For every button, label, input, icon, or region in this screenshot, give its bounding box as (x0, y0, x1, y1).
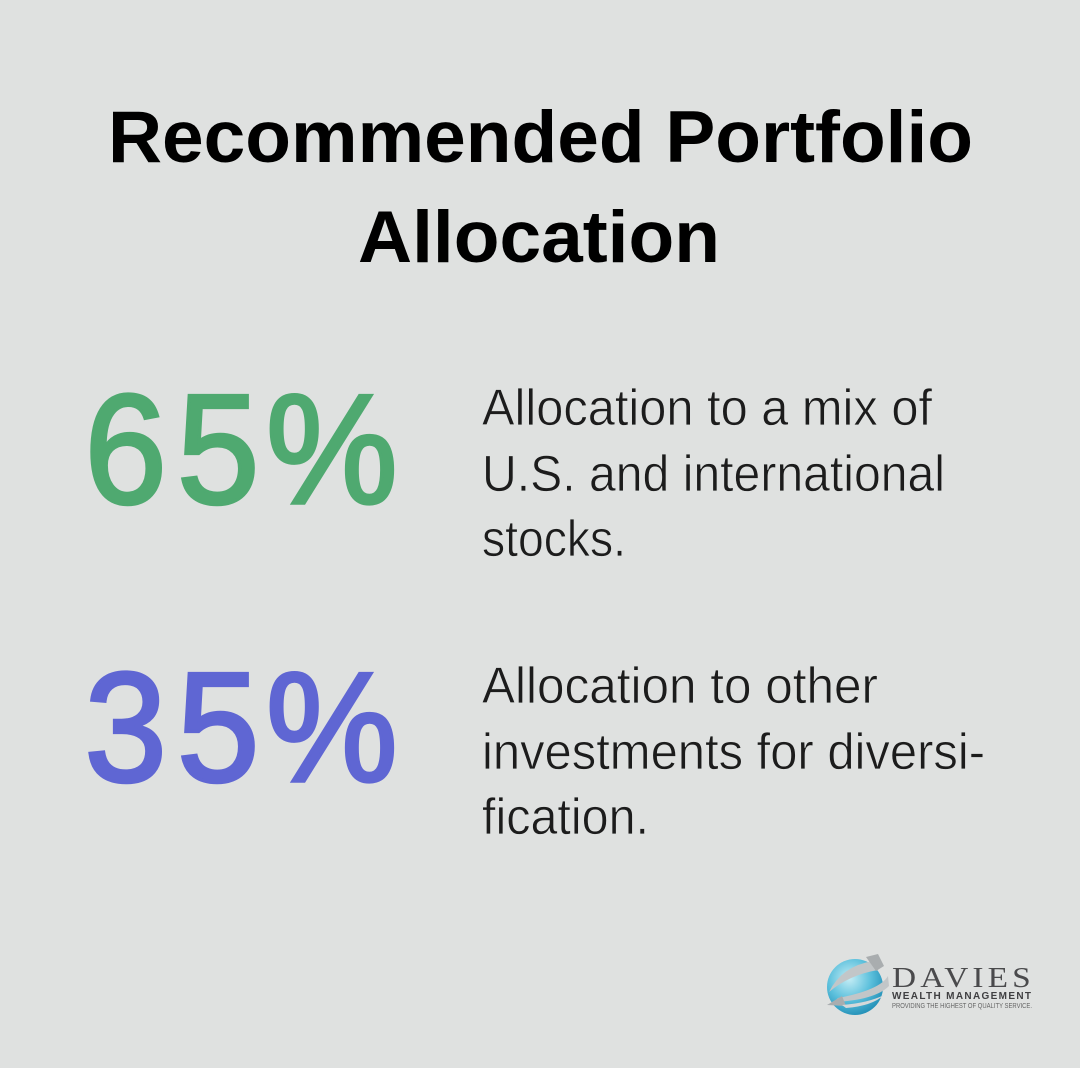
description: 65% allocation: stocks. (482, 510, 626, 567)
logo tagline: PROVIDING THE HIGHEST OF QUALITY SERVICE. (892, 1003, 1032, 1010)
title: Recommended Portfolio (108, 97, 973, 178)
description: 35% allocation: Allocation to other (482, 657, 878, 714)
description: 65% allocation: U.S. and international (482, 445, 945, 502)
stat: 35%: 35% (84, 641, 398, 815)
description: 35% allocation: fication. (482, 788, 649, 845)
description: 35% allocation: investments for diversi- (482, 723, 985, 780)
title (108, 97, 973, 278)
description: 65% allocation (482, 379, 945, 567)
logo: Davies Wealth Management (827, 954, 1035, 1015)
description: 65% allocation: Allocation to a mix of (482, 379, 933, 436)
icon: globe with arrows (827, 954, 889, 1015)
description: 35% allocation (482, 657, 985, 845)
logo wordmark: DAVIES (892, 961, 1035, 993)
stat: 65%: 65% (84, 363, 398, 537)
logo subtitle: WEALTH MANAGEMENT (892, 991, 1031, 1002)
title: Allocation (358, 197, 720, 278)
